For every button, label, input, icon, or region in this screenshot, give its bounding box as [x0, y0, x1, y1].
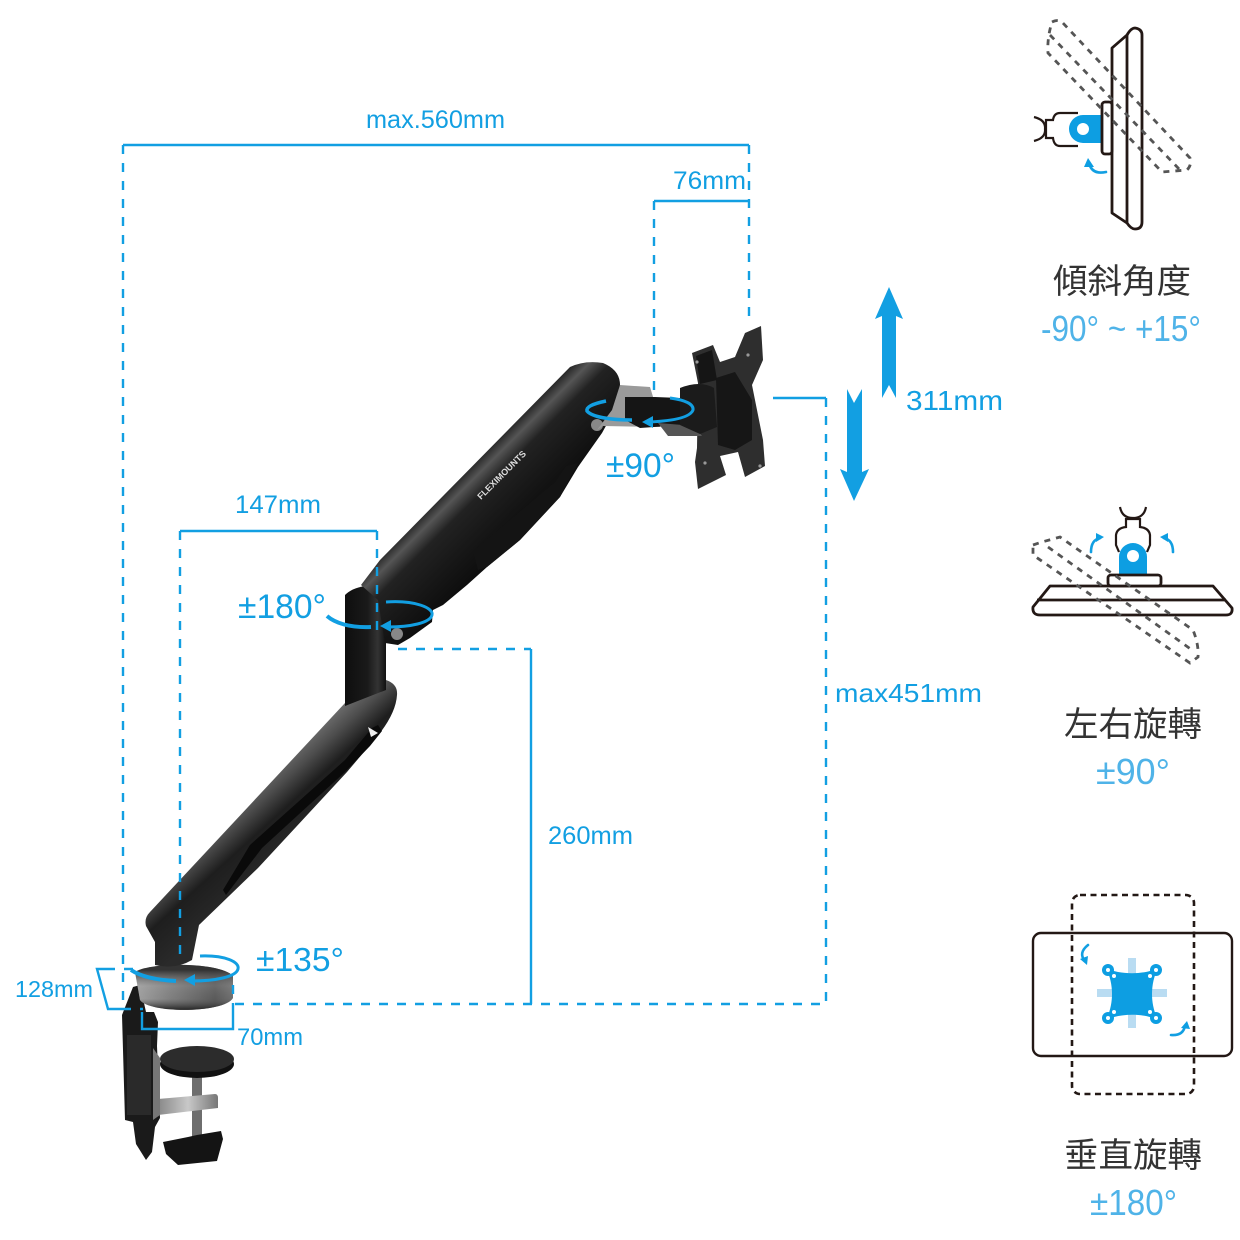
white notch: [368, 727, 378, 737]
label 260mm: 260mm: [548, 822, 633, 850]
column: [345, 586, 386, 706]
76mm line: [654, 201, 749, 392]
dimension lines: [97, 145, 826, 1029]
label max451mm: max451mm: [835, 678, 982, 708]
70mm line: [142, 985, 233, 1029]
label 311mm: 311mm: [906, 385, 1003, 416]
label 128mm: 128mm: [15, 976, 93, 1002]
logo: FLEXIMOUNTS: [475, 449, 528, 501]
base disk: [135, 965, 233, 1010]
rotation arrow 90: [587, 398, 693, 428]
label ±90°: ±90°: [606, 447, 675, 485]
label max.560mm: max.560mm: [366, 106, 505, 134]
value: swivel: ±90°: [1096, 751, 1170, 792]
heading: swivel: 左右旋轉: [1064, 706, 1202, 744]
147mm line: [180, 531, 377, 955]
heading: tilt: 傾斜角度: [1053, 263, 1191, 301]
down arrow: [840, 389, 869, 501]
label 147mm: 147mm: [235, 491, 321, 519]
dimension labels: [15, 106, 1003, 1051]
label ±135°: ±135°: [256, 941, 344, 978]
rotation arrow 135: [131, 956, 238, 986]
max451 line: [233, 398, 826, 1004]
panel: tilt: [1034, 20, 1201, 349]
label ±180°: ±180°: [238, 588, 326, 626]
label 70mm: 70mm: [237, 1024, 303, 1051]
rotation arrow 180: [327, 602, 432, 632]
icon: swivel monitor: [1033, 507, 1232, 663]
panel: rotation: [1033, 895, 1232, 1223]
up arrow: [875, 287, 903, 398]
128mm bracket: [97, 969, 143, 1009]
panel: swivel: [1033, 507, 1232, 792]
icon: tilt monitor: [1034, 20, 1191, 229]
max 560 line: [123, 145, 749, 1010]
heading: rotation: 垂直旋轉: [1064, 1137, 1202, 1175]
upper arm cover: [473, 463, 578, 570]
lower arm: [146, 680, 397, 967]
lower arm slot: [223, 725, 382, 895]
value: rotation: ±180°: [1090, 1182, 1177, 1223]
arm pivots: [391, 419, 603, 640]
260mm line: [398, 649, 531, 1004]
clamp assembly: [122, 985, 234, 1165]
upper arm: [361, 362, 620, 645]
label 76mm: 76mm: [673, 167, 746, 195]
tilt joint and VESA plate: [597, 326, 765, 489]
value: tilt: -90° ~ +15°: [1041, 308, 1201, 349]
icon: rotation monitor: [1033, 895, 1232, 1094]
monitor arm product: [122, 326, 765, 1165]
